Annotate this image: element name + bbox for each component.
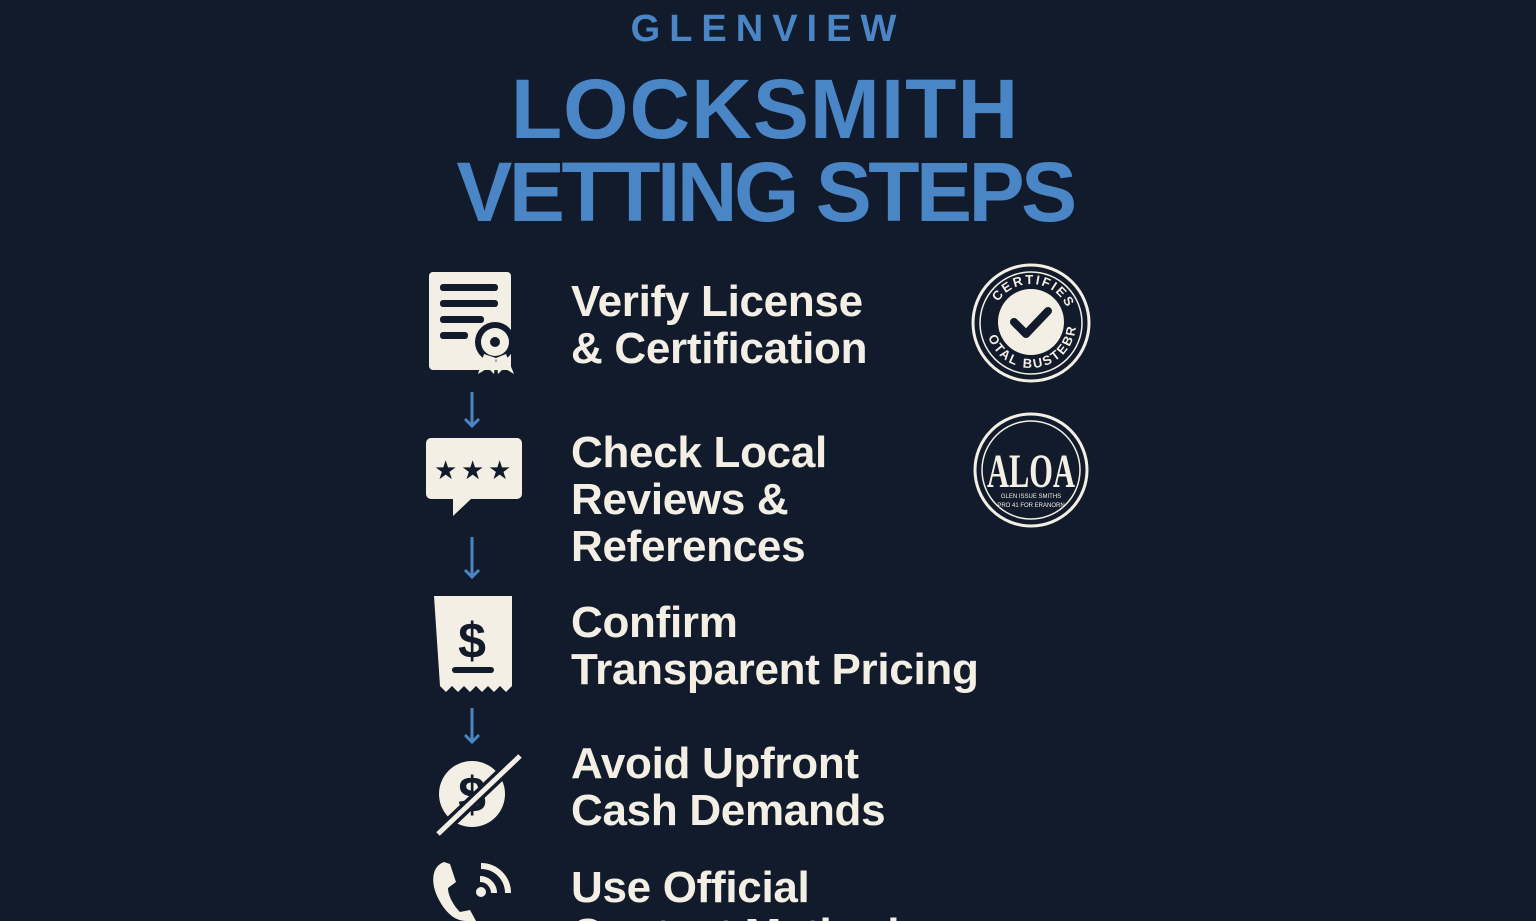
icon: license document [429,272,514,374]
step 5 text [571,863,923,921]
arrow 3 [464,708,480,744]
step 2 text: Reviews & [571,475,788,524]
badge: ALOA: PRO 41 FOR ERANORN [997,503,1065,509]
step 2 text: References [571,522,805,571]
title: LOCKSMITH [511,62,1019,156]
step 2 text: Check Local [571,428,827,477]
icon: review bubble: ★ [488,456,511,486]
icon: no cash: $ [458,767,486,823]
badge: ALOA [974,412,1088,528]
arrow 1 [464,392,480,428]
badge: ALOA: GLEN ISSUE SMITHS [1001,494,1061,500]
step 2 text [571,428,827,571]
step 5 text: Use Official [571,863,810,912]
icon: review bubble: ★ [434,456,457,486]
badge: certified: CERTIFIES [992,275,1074,306]
step 4 text: Cash Demands [571,786,885,835]
step 4 text [571,739,885,835]
icon: phone [433,862,511,921]
icon: pricing receipt: $ [458,613,486,669]
step 3 text: Confirm [571,598,738,647]
step 1 text: & Certification [571,324,867,373]
step 4 text: Avoid Upfront [571,739,859,788]
icon: pricing receipt [434,596,512,692]
icon: review bubble [426,438,522,516]
step 1 text: Verify License [571,277,863,326]
arrow 2 [464,537,480,579]
title: VETTING STEPS [456,145,1074,239]
icon: review bubble: ★ [461,456,484,486]
step 3 text [571,598,979,694]
subtitle: GLENVIEW [631,8,905,50]
icon: no cash [436,754,522,836]
step 1 text [571,277,867,373]
title [456,62,1074,239]
step 3 text: Transparent Pricing [571,645,979,694]
